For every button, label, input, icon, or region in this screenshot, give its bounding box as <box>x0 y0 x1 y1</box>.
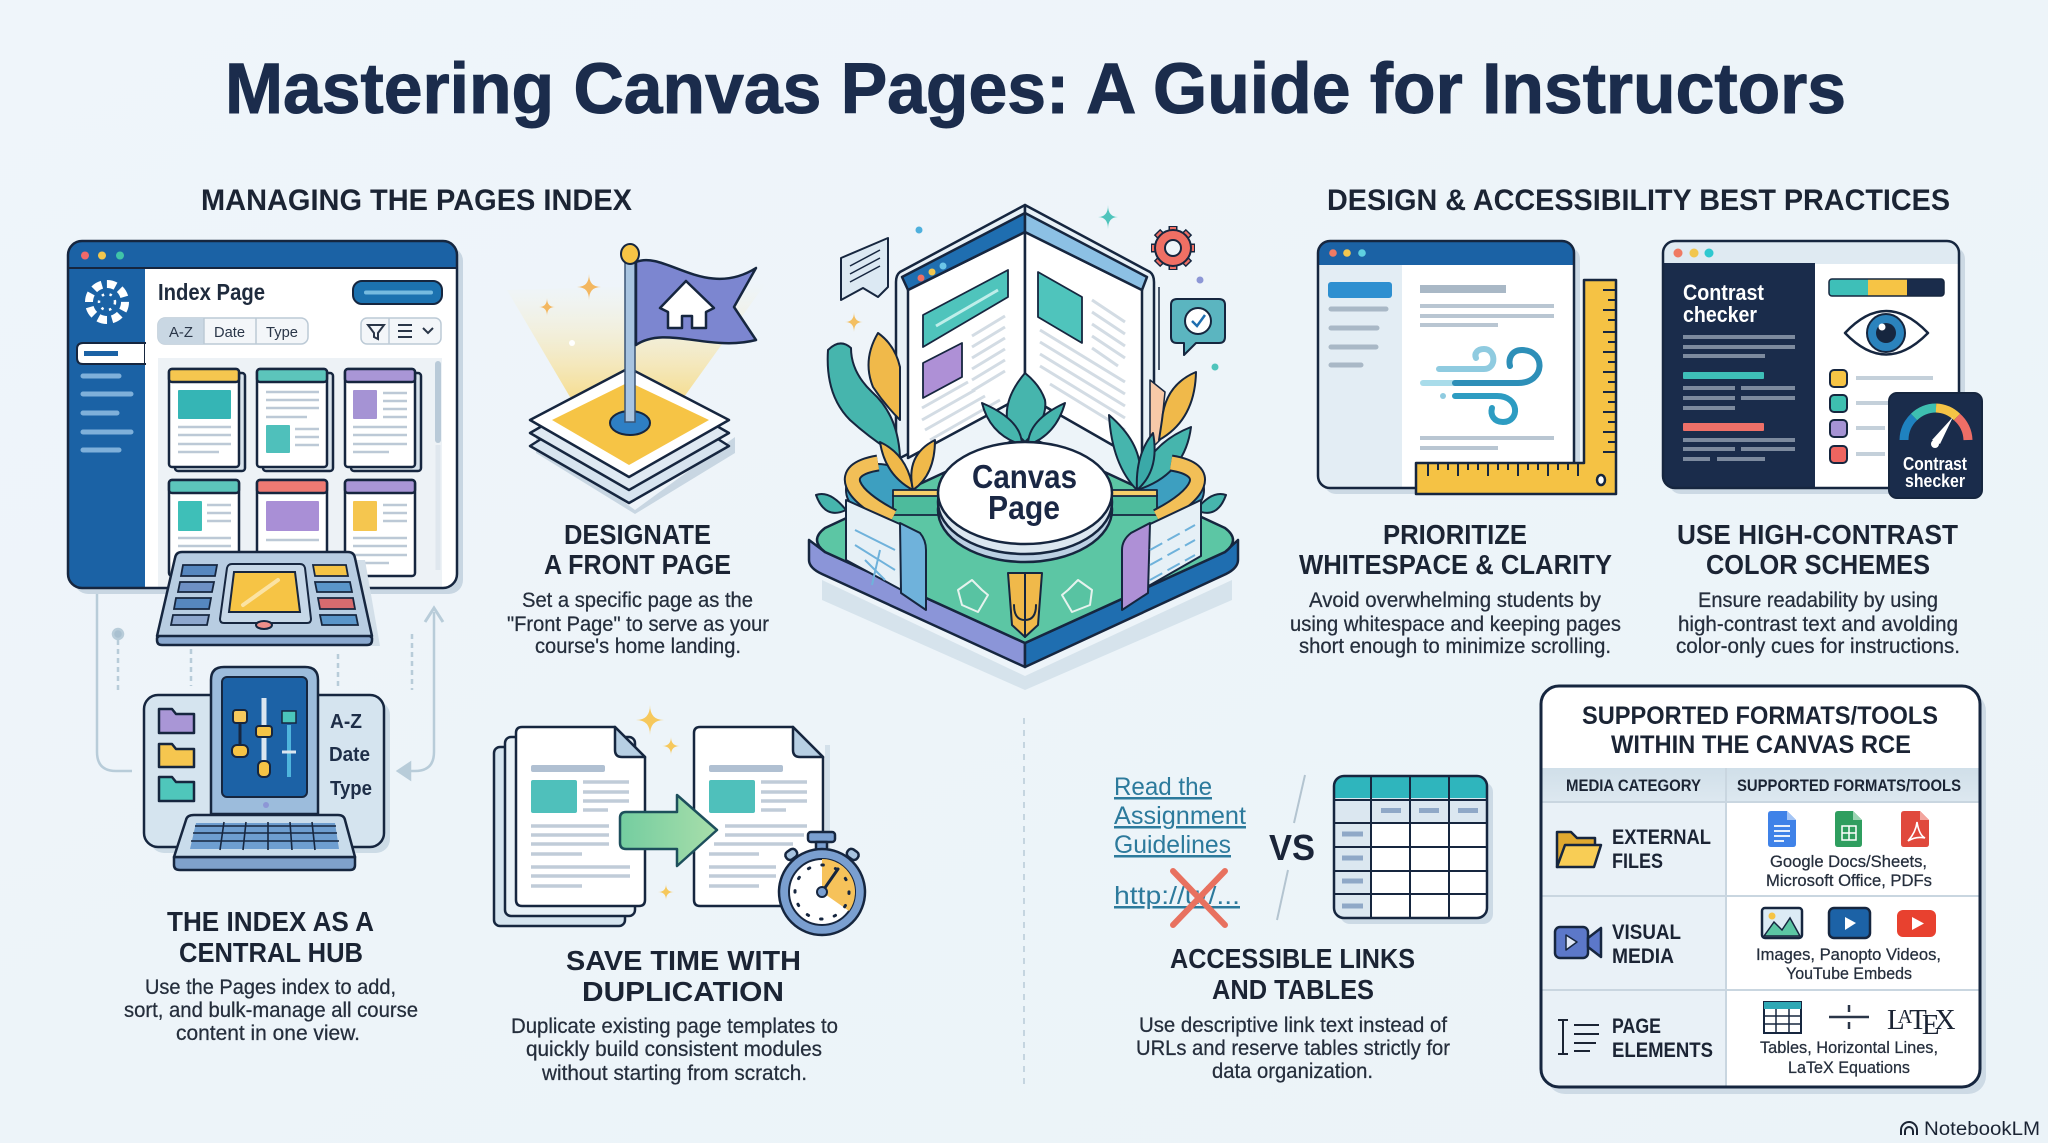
icon: gear <box>1151 226 1195 270</box>
sort labels <box>329 711 372 800</box>
contrast checker label <box>1683 280 1765 327</box>
text: save time with duplication: Duplicate existing page templates to <box>511 1015 838 1038</box>
illustration: duplicate pages <box>494 705 865 935</box>
text: prioritize whitespace and clarity <box>1290 519 1621 658</box>
gauge card <box>1889 393 1982 498</box>
text: save time with duplication: without starting from scratch. <box>541 1062 807 1085</box>
sparkles <box>636 705 680 900</box>
text: save time with duplication: SAVE TIME WITH <box>566 945 801 976</box>
panel: supported formats table <box>1541 686 1986 1094</box>
descriptive link text: Assignment <box>1114 802 1246 830</box>
arrow <box>620 795 717 866</box>
text: use high-contrast color schemes: high-contrast text and avolding <box>1678 613 1958 636</box>
sparkles <box>539 274 601 346</box>
text: accessible links and tables: ACCESSIBLE LINKS <box>1170 943 1415 974</box>
row: external files: Google Docs/Sheets, <box>1770 852 1927 871</box>
icon: table divider latex: L <box>1887 1004 1905 1036</box>
sort tabs: A-Z <box>169 324 193 341</box>
text: save time with duplication: quickly build consistent modules <box>526 1038 822 1061</box>
sort labels: A-Z <box>330 711 362 733</box>
contrast checker label: Contrast <box>1683 280 1765 305</box>
row: external files <box>1557 811 1932 890</box>
button <box>353 281 442 304</box>
sort tabs: Date <box>214 324 245 341</box>
filter and list controls <box>361 318 441 344</box>
flag with house <box>636 260 756 345</box>
text: prioritize whitespace and clarity: Avoid overwhelming students by <box>1309 589 1601 612</box>
icon: folder <box>1557 832 1601 867</box>
curved side walls <box>846 463 1201 610</box>
icon: wind swirl <box>1423 349 1540 422</box>
icon: table divider latex <box>1764 1002 1956 1041</box>
row: external files: EXTERNAL <box>1612 826 1711 849</box>
text: prioritize whitespace and clarity: WHITESPACE & CLARITY <box>1299 549 1612 580</box>
descriptive link text: Read the <box>1114 773 1212 801</box>
text: use high-contrast color schemes: Ensure readability by using <box>1698 589 1938 612</box>
page grid <box>158 358 442 588</box>
color bar <box>1829 279 1944 296</box>
icon: table divider latex: A <box>1898 1006 1913 1028</box>
sidebar nav <box>77 343 149 450</box>
row: visual media <box>1555 908 1941 983</box>
connector lines <box>97 588 443 779</box>
sort tabs <box>158 318 308 344</box>
text: the index as a central hub: sort, and bulk-manage all course <box>124 999 418 1022</box>
flag pole <box>610 244 650 435</box>
text: the index as a central hub: THE INDEX AS A <box>167 906 374 937</box>
text: designate a front page: "Front Page" to serve as your <box>507 613 769 636</box>
isometric platform <box>809 435 1238 690</box>
planters <box>893 490 1157 515</box>
row: visual media: MEDIA <box>1612 945 1674 968</box>
row: page elements: Tables, Horizontal Lines, <box>1760 1038 1938 1057</box>
laptop hub with folders and sliders <box>144 667 390 870</box>
descriptive link text: Guidelines <box>1114 831 1231 859</box>
page card 4 <box>169 480 239 576</box>
icon: ruler <box>1416 280 1616 494</box>
page card 1 <box>169 369 245 471</box>
panel title <box>1582 702 1938 759</box>
table header: SUPPORTED FORMATS/TOOLS <box>1737 776 1961 795</box>
illustration: central canvas page <box>809 205 1238 690</box>
illustration: index window and hub <box>68 241 463 870</box>
text: prioritize whitespace and clarity: PRIORITIZE <box>1383 519 1527 550</box>
icon: stopwatch <box>779 832 865 935</box>
open page book <box>896 205 1165 465</box>
color swatches <box>1830 370 1847 463</box>
sort tabs: Type <box>266 324 298 341</box>
table header: MEDIA CATEGORY <box>1566 776 1702 795</box>
page card 5 <box>257 480 327 576</box>
text: accessible links and tables: Use descriptive link text instead of <box>1139 1014 1447 1037</box>
descriptive link text: http://u//... <box>1114 882 1240 910</box>
illustration: designate front page flag <box>507 244 766 514</box>
index page window <box>68 241 463 594</box>
keyboard <box>174 815 355 870</box>
row: visual media: YouTube Embeds <box>1786 964 1912 983</box>
tablet device <box>157 552 380 646</box>
sort labels: Date <box>329 744 370 766</box>
stacked source sheets <box>494 727 645 926</box>
sort labels: Type <box>330 778 372 800</box>
illustration: links versus tables <box>1114 773 1493 925</box>
icon: check bubble <box>1171 299 1225 355</box>
text: accessible links and tables: URLs and reserve tables strictly for <box>1136 1037 1450 1060</box>
heading: design and accessibility best practices: DESIGN & ACCESSIBILITY BEST PRACTICES <box>1327 184 1950 217</box>
descriptive link text <box>1114 773 1246 910</box>
logo: notebooklm: NotebookLM <box>1924 1119 2040 1140</box>
text: the index as a central hub: Use the Pages index to add, <box>145 976 396 999</box>
row: visual media: Images, Panopto Videos, <box>1756 945 1941 964</box>
gauge card: shecker <box>1905 471 1965 491</box>
text: use high-contrast color schemes <box>1676 519 1960 658</box>
text: use high-contrast color schemes: COLOR SCHEMES <box>1706 549 1930 580</box>
text: the index as a central hub: CENTRAL HUB <box>179 937 363 968</box>
text: accessible links and tables: data organization. <box>1212 1060 1373 1083</box>
panel title: SUPPORTED FORMATS/TOOLS <box>1582 702 1938 730</box>
text: save time with duplication: DUPLICATION <box>582 976 784 1007</box>
icon: eye <box>1845 311 1928 354</box>
central screen with sliders <box>211 667 318 814</box>
heading: managing the pages index: MANAGING THE PAGES INDEX <box>201 184 632 217</box>
floor plant motif <box>958 573 1092 637</box>
page card 2 <box>257 369 333 471</box>
vs: VS <box>1269 827 1315 868</box>
illustration: whitespace window and ruler <box>1318 241 1616 494</box>
page card 3 <box>345 369 421 471</box>
text: prioritize whitespace and clarity: using whitespace and keeping pages <box>1290 613 1621 636</box>
icon: video camera <box>1555 927 1601 958</box>
text: prioritize whitespace and clarity: short enough to minimize scrolling. <box>1299 635 1611 658</box>
row: external files: Microsoft Office, PDFs <box>1766 871 1932 890</box>
row: page elements <box>1558 1002 1956 1077</box>
red x <box>1173 871 1225 925</box>
page card 6 <box>345 480 415 576</box>
light beam <box>507 283 766 397</box>
icon: image panopto youtube <box>1762 908 1936 938</box>
icon: table divider latex: E <box>1922 1009 1940 1041</box>
text: the index as a central hub: content in one view. <box>176 1022 360 1045</box>
text: accessible links and tables: AND TABLES <box>1212 974 1374 1005</box>
row: page elements: LaTeX Equations <box>1788 1058 1910 1077</box>
text: use high-contrast color schemes: color-only cues for instructions. <box>1676 635 1960 658</box>
title: Mastering Canvas Pages: A Guide for Instructors <box>225 50 1846 129</box>
canvas logo <box>89 284 125 320</box>
panel title: WITHIN THE CANVAS RCE <box>1611 731 1911 759</box>
text: save time with duplication <box>511 945 838 1085</box>
icon: chat bubble <box>841 238 888 300</box>
gauge card: Contrast <box>1903 454 1967 474</box>
center medallion: Page <box>988 489 1060 526</box>
row: page elements: PAGE <box>1612 1015 1661 1038</box>
center medallion <box>938 442 1112 562</box>
leaves <box>816 333 1226 513</box>
duplicated page <box>694 727 830 906</box>
text: use high-contrast color schemes: USE HIGH-CONTRAST <box>1677 519 1958 550</box>
illustration: contrast checker window <box>1663 241 1982 498</box>
icon: docs sheets pdf <box>1768 811 1929 847</box>
icon: table divider latex: T <box>1909 1004 1927 1036</box>
contrast checker label: checker <box>1683 302 1757 327</box>
row: page elements: ELEMENTS <box>1612 1039 1713 1062</box>
icon: text cursor lines <box>1558 1020 1599 1054</box>
text: designate a front page: DESIGNATE <box>564 519 711 550</box>
sparkles and dots <box>845 205 1218 370</box>
table header <box>1566 776 1961 795</box>
text: accessible links and tables <box>1136 943 1450 1083</box>
text: designate a front page: A FRONT PAGE <box>544 549 731 580</box>
center medallion: Canvas <box>972 458 1077 495</box>
stacked page base <box>530 368 735 514</box>
text: designate a front page: course's home landing. <box>535 635 741 658</box>
icon: table divider latex: X <box>1935 1004 1956 1036</box>
heading: index page: Index Page <box>158 279 265 305</box>
row: visual media: VISUAL <box>1612 921 1681 944</box>
text: designate a front page: Set a specific page as the <box>522 589 753 612</box>
row: external files: FILES <box>1612 850 1663 873</box>
text: designate a front page <box>507 519 769 658</box>
table <box>1334 776 1493 924</box>
folders <box>159 709 194 801</box>
text: the index as a central hub <box>124 906 418 1045</box>
